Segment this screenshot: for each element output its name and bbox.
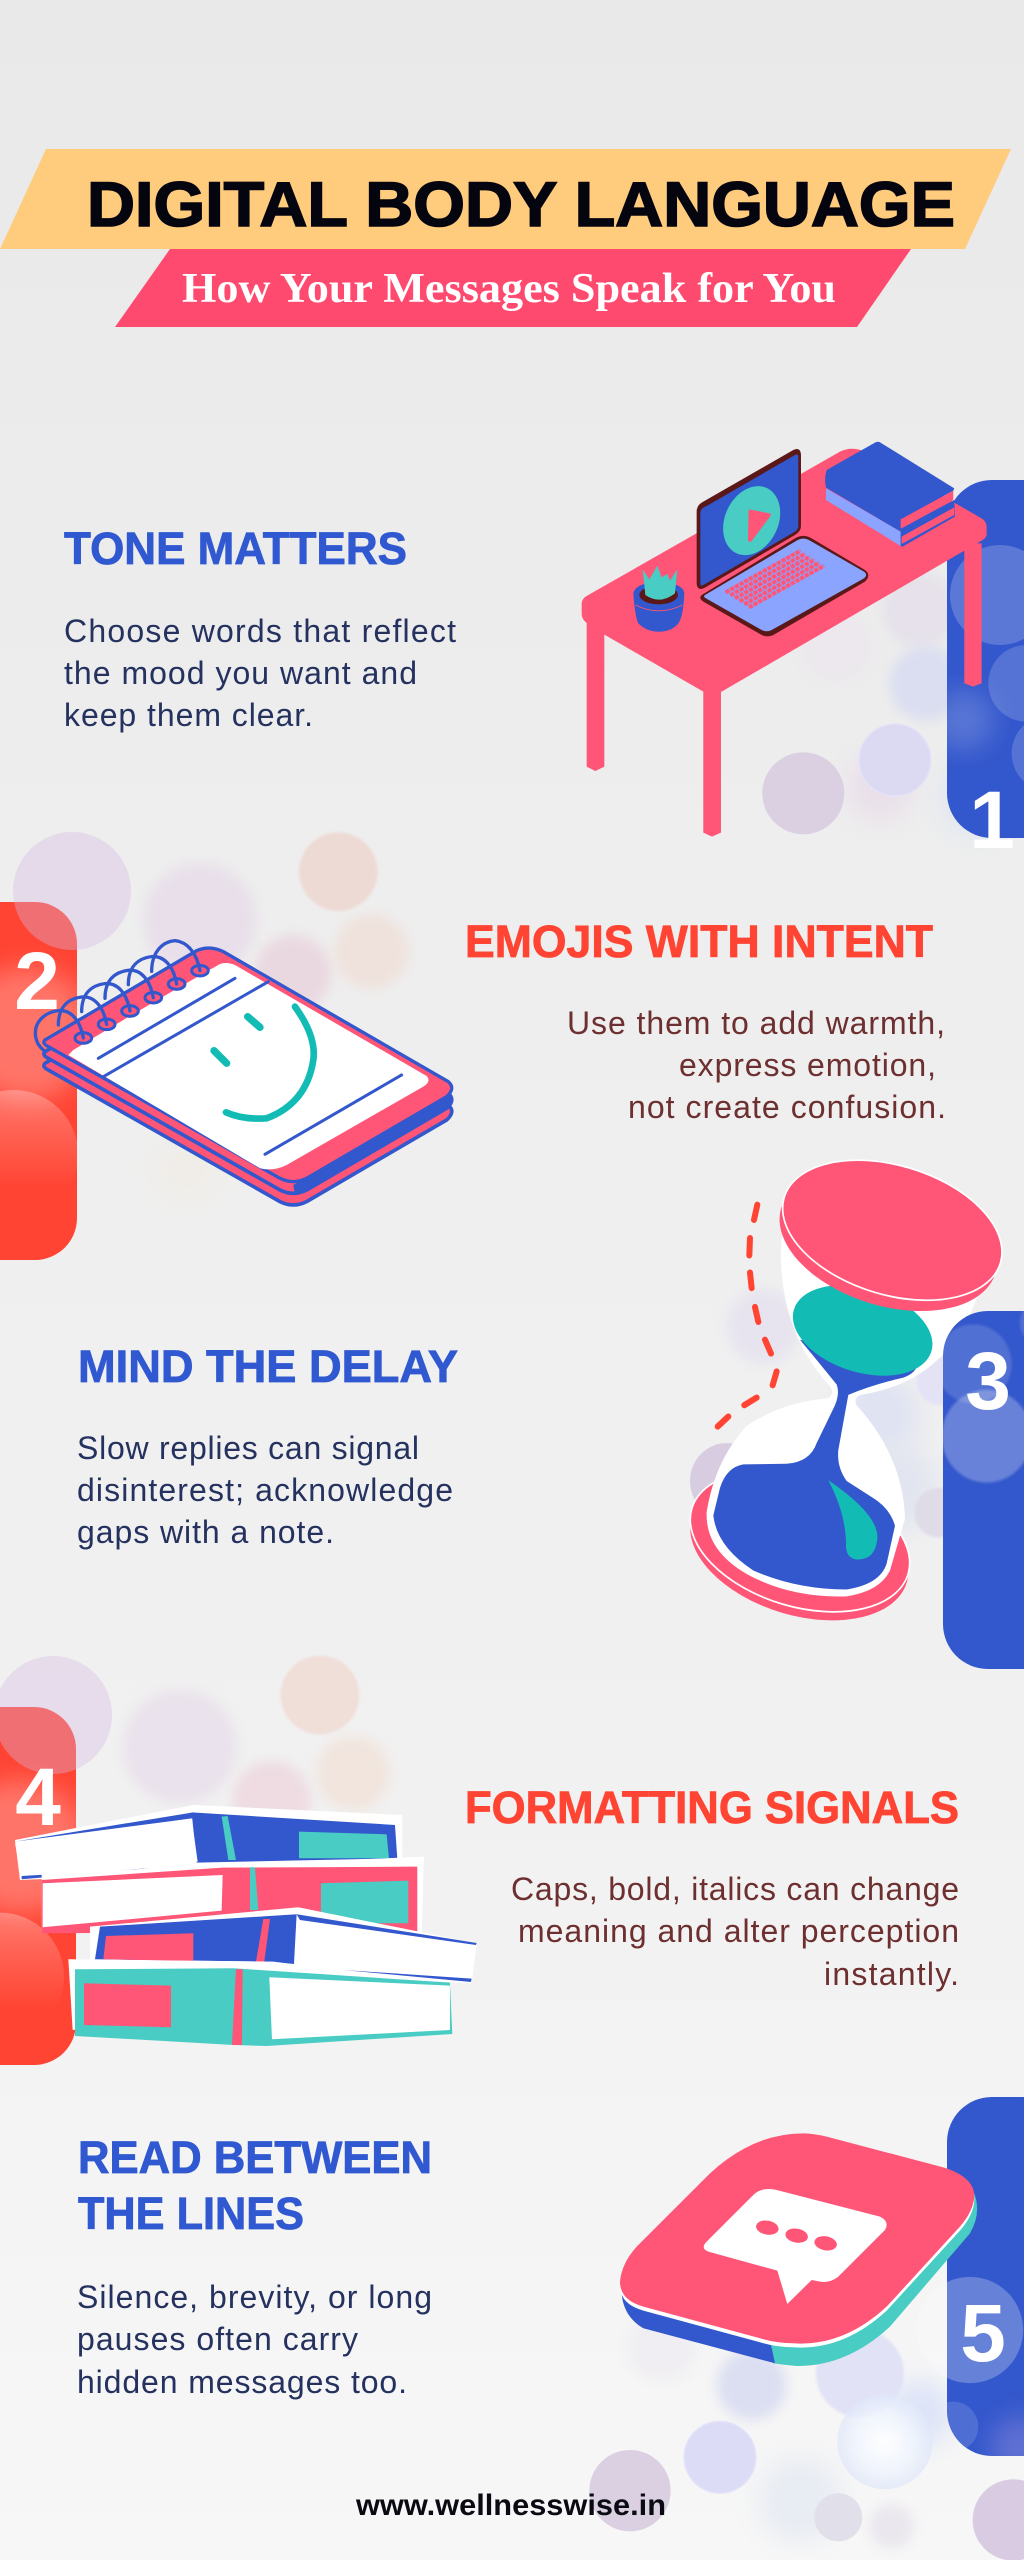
- bokeh over panel 5: [917, 2277, 1023, 2383]
- panel 1 highlights: [933, 545, 1024, 792]
- number panel 3: [943, 1311, 1024, 1669]
- panel 3 highlights: [943, 1311, 1024, 1484]
- heading: formatting signals: FORMATTING SIGNALS: [465, 1782, 959, 1833]
- text: read between the lines: pauses often carry: [77, 2321, 358, 2357]
- number panel 2: [0, 902, 77, 1260]
- number 3: 3: [965, 1336, 1011, 1427]
- heading: read between the lines: READ BETWEEN: [78, 2132, 432, 2183]
- text: mind the delay: disinterest; acknowledge: [77, 1472, 453, 1508]
- bokeh over panel 2: [13, 832, 131, 950]
- text: tone matters: the mood you want and: [64, 655, 417, 691]
- panel 5 highlights: [947, 2402, 1024, 2456]
- section 1: tone matters: [64, 442, 1024, 866]
- footer website: www.wellnesswise.in: [355, 2489, 666, 2522]
- background bokeh 4: [123, 1656, 391, 1839]
- title: DIGITAL BODY LANGUAGE: [87, 170, 955, 240]
- number 5: 5: [960, 2288, 1006, 2379]
- background bokeh 1: [762, 573, 1020, 837]
- number 1: 1: [969, 775, 1015, 866]
- number 2: 2: [14, 936, 60, 1027]
- text: mind the delay: gaps with a note.: [77, 1514, 334, 1550]
- text: emojis with intent: not create confusion.: [628, 1089, 946, 1125]
- heading: emojis with intent: EMOJIS WITH INTENT: [465, 916, 933, 967]
- heading: tone matters: TONE MATTERS: [64, 523, 407, 574]
- text: tone matters: Choose words that reflect: [64, 613, 456, 649]
- heading: read between the lines: THE LINES: [78, 2188, 304, 2239]
- illustration: stack of books: [15, 1805, 477, 2046]
- panel 2 highlights: [0, 956, 77, 1173]
- section 2: emojis with intent: [0, 832, 946, 1260]
- text: read between the lines: hidden messages too.: [77, 2364, 407, 2400]
- section 5: read between the lines: [77, 2097, 1024, 2560]
- title banner: [0, 149, 1011, 249]
- number panel 4: [0, 1707, 76, 2065]
- number panel 5: [947, 2097, 1024, 2456]
- text: formatting signals: Caps, bold, italics can change: [511, 1871, 959, 1907]
- text: tone matters: keep them clear.: [64, 697, 313, 733]
- text: formatting signals: meaning and alter perception: [518, 1913, 959, 1949]
- text: emojis with intent: Use them to add warmth,: [567, 1005, 945, 1041]
- number panel 1: [947, 480, 1024, 838]
- heading: mind the delay: MIND THE DELAY: [78, 1341, 458, 1392]
- illustration: spiral notepad with smile: [35, 941, 453, 1205]
- section 4: formatting signals: [0, 1656, 959, 2065]
- illustration: chat bubble tile: [620, 2133, 977, 2366]
- background bokeh 5: [589, 2312, 1024, 2560]
- text: formatting signals: instantly.: [824, 1956, 959, 1992]
- illustration: desk with laptop, plant and books: [582, 442, 987, 837]
- text: read between the lines: Silence, brevity, or long: [77, 2279, 432, 2315]
- text: emojis with intent: express emotion,: [679, 1047, 936, 1083]
- panel 4 highlights: [0, 1770, 76, 1994]
- background bokeh 2: [143, 832, 409, 1203]
- subtitle: How Your Messages Speak for You: [182, 266, 836, 312]
- illustration: hourglass: [674, 1136, 1018, 1645]
- subtitle banner: [115, 249, 911, 327]
- number 4: 4: [15, 1752, 61, 1843]
- background bokeh 3: [690, 1288, 963, 1537]
- bokeh over panel 4: [0, 1656, 112, 1774]
- section 3: mind the delay: [77, 1136, 1024, 1669]
- text: mind the delay: Slow replies can signal: [77, 1430, 419, 1466]
